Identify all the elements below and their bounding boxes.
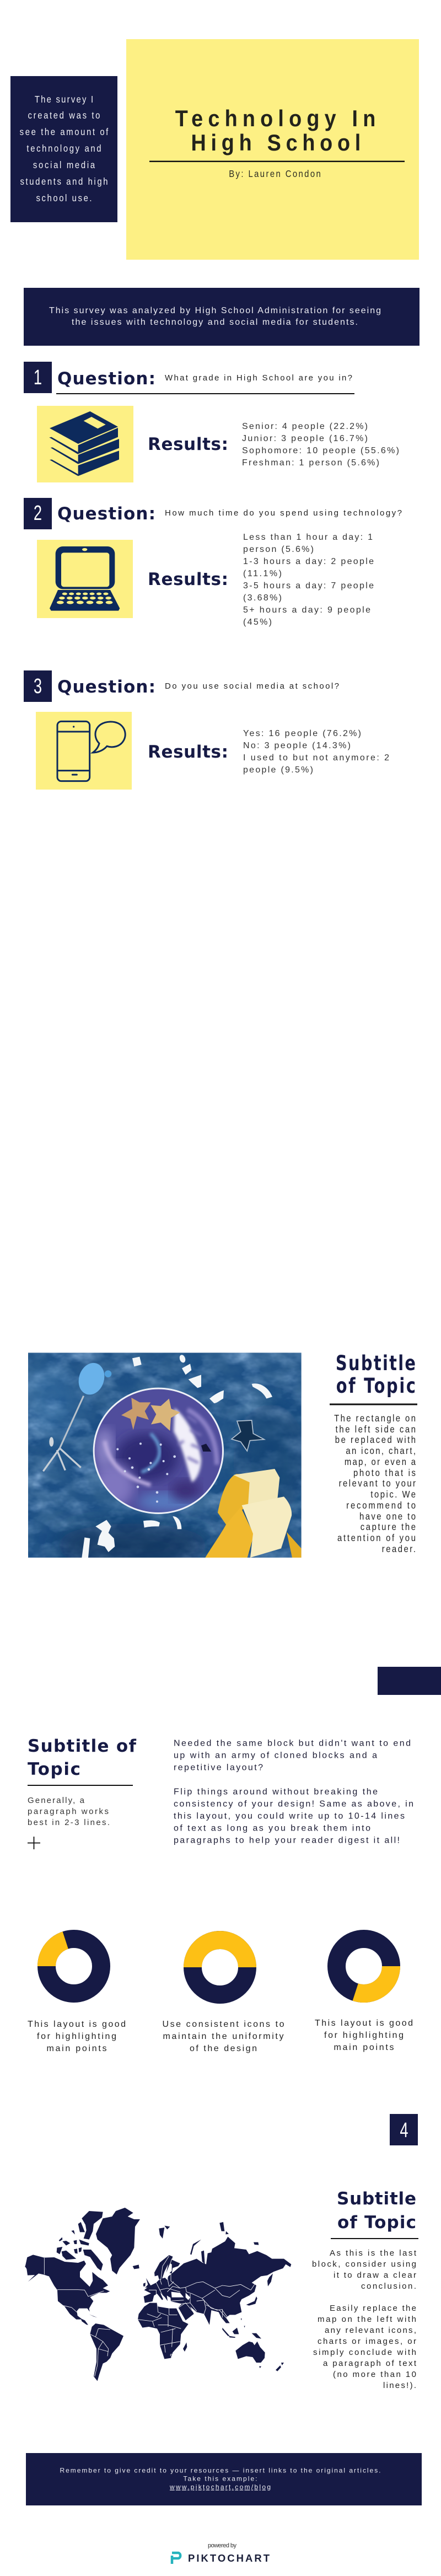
subtitle 1 heading: of Topic xyxy=(336,1373,416,1398)
question 3 text: Do you use social media at school? xyxy=(165,681,339,691)
title: High School xyxy=(191,130,361,155)
number badge 2: 2 xyxy=(34,502,42,525)
subtitle 3 heading xyxy=(337,2189,416,2232)
donut label 3: for highlighting xyxy=(324,2031,404,2040)
footer banner: credits xyxy=(26,2453,422,2505)
donut label 1: for highlighting xyxy=(37,2032,116,2041)
results 2 list: Less than 1 hour a day: 1 xyxy=(243,533,373,542)
coconut pieces xyxy=(82,1354,272,1558)
results 2 label: Results: xyxy=(148,570,228,589)
results 1 list: Senior: 4 people (22.2%) xyxy=(242,422,368,431)
results 2 list: 3-5 hours a day: 7 people xyxy=(243,581,374,591)
body paragraph block xyxy=(174,1739,413,1845)
question 3 heading: Question: xyxy=(57,677,155,697)
star cookie cutter xyxy=(232,1420,264,1451)
question 1 heading: Question: xyxy=(57,369,155,389)
title panel xyxy=(126,39,419,260)
subtitle 3 paragraphs: map on the left with xyxy=(318,2315,416,2324)
number badge 2 xyxy=(24,498,52,529)
results 3 list: No: 3 people (14.3%) xyxy=(243,741,351,750)
body paragraph block: of text as long as you break them into xyxy=(174,1824,370,1833)
results 3 label: Results: xyxy=(148,742,228,762)
subtitle 3 paragraphs: simply conclude with xyxy=(313,2348,416,2357)
question 2 section xyxy=(24,498,402,627)
donut label 3 xyxy=(315,2019,413,2052)
subtitle 1 paragraph: attention of you xyxy=(337,1533,416,1543)
subtitle 3 paragraphs: it to draw a clear xyxy=(334,2271,416,2280)
subtitle 2 short paragraph: Generally, a xyxy=(28,1796,85,1805)
footer banner: credits: Remember to give credit to your resources — insert links to the original articles. xyxy=(60,2467,381,2475)
subtitle 1 heading: Subtitle xyxy=(336,1351,416,1375)
intro text: social media xyxy=(33,160,95,170)
body paragraph block: paragraphs to help your reader digest it all! xyxy=(174,1836,400,1845)
subtitle 1 paragraph: the left side can xyxy=(336,1424,416,1435)
subtitle block 2 xyxy=(28,1736,137,1849)
subtitle 3 heading: Subtitle xyxy=(337,2189,416,2209)
navy corner block xyxy=(378,1667,441,1695)
results 1 label: Results: xyxy=(148,434,228,454)
donut label 2 xyxy=(162,2020,284,2053)
donut label 3: This layout is good xyxy=(315,2019,413,2028)
body paragraph block: consistency of your design! Same as above, in xyxy=(174,1800,413,1808)
intro text xyxy=(20,94,109,203)
results 2 list: (11.1%) xyxy=(243,569,282,578)
results 3 list: people (9.5%) xyxy=(243,765,313,775)
donut label 1 xyxy=(28,2020,126,2053)
subtitle 3 paragraphs: a paragraph of text xyxy=(323,2359,417,2368)
subtitle 2 short paragraph: paragraph works xyxy=(28,1807,109,1816)
results 1 list xyxy=(242,422,399,468)
subtitle 3 paragraphs: Easily replace the xyxy=(330,2304,416,2313)
results 2 list: 5+ hours a day: 9 people xyxy=(243,605,370,615)
subtitle 3 heading: of Topic xyxy=(337,2213,416,2232)
map: Europe, Africa, Asia, Oceania xyxy=(138,2222,291,2371)
banana xyxy=(205,1469,302,1558)
bowl xyxy=(93,1388,224,1515)
results 3 list xyxy=(243,729,389,775)
powered by Piktochart logo: powered by xyxy=(208,2542,237,2549)
subtitle 3 paragraphs: (no more than 10 xyxy=(333,2370,416,2379)
subtitle 3 paragraphs xyxy=(312,2248,417,2390)
body paragraph block: up with an army of cloned blocks and a xyxy=(174,1751,377,1760)
footer banner: credits: Take this example: xyxy=(183,2475,257,2482)
subtitle 1 paragraph: topic. We xyxy=(370,1489,416,1500)
question 1 section xyxy=(24,362,399,482)
subtitle 2 heading: Topic xyxy=(28,1759,80,1779)
results 1 list: Sophomore: 10 people (55.6%) xyxy=(242,446,399,455)
subtitle 1 paragraph: capture the xyxy=(361,1522,416,1532)
world map xyxy=(25,2208,291,2381)
question 2 heading: Question: xyxy=(57,504,155,524)
subtitle 1 heading xyxy=(336,1351,416,1398)
intro panel: survey purpose xyxy=(10,76,117,222)
icon: Piktochart mark xyxy=(172,2553,180,2564)
icon: laptop xyxy=(37,540,133,618)
banner: survey analysis note: the issues with technology and social media for students. xyxy=(72,318,358,327)
icon: plus xyxy=(28,1837,40,1849)
donut label 2: of the design xyxy=(190,2044,257,2053)
number badge 1: 1 xyxy=(34,366,42,389)
donut label 3: main points xyxy=(334,2043,394,2052)
subtitle 2 heading: Subtitle of xyxy=(28,1736,137,1756)
subtitle 2 heading xyxy=(28,1736,137,1779)
subtitle 1 paragraph: photo that is xyxy=(353,1468,416,1478)
number badge 3: 3 xyxy=(34,675,42,698)
subtitle 3 paragraphs: As this is the last xyxy=(330,2248,417,2258)
donut label 1: main points xyxy=(46,2044,107,2053)
question 1 text: What grade in High School are you in? xyxy=(165,373,352,383)
number badge 4: 4 xyxy=(400,2119,408,2142)
number badge 3 xyxy=(24,670,52,702)
results 2 list: (3.68%) xyxy=(243,593,282,603)
body paragraph block: Needed the same block but didn't want to end xyxy=(174,1739,411,1748)
icon: phone with speech bubble xyxy=(36,712,132,790)
subtitle 3 paragraphs: lines!). xyxy=(383,2381,416,2390)
body paragraph block: Flip things around without breaking the xyxy=(174,1788,378,1796)
subtitle 3 paragraphs: conclusion. xyxy=(361,2282,416,2291)
donut chart 3 xyxy=(336,1939,400,2003)
number badge 1 xyxy=(24,362,52,393)
subtitle block 1 xyxy=(330,1351,417,1554)
question 3 section xyxy=(24,670,389,790)
results 2 list: person (5.6%) xyxy=(243,545,314,554)
donut chart 2 xyxy=(184,1931,256,1995)
subtitle 1 paragraph: recommend to xyxy=(346,1500,416,1511)
powered by Piktochart logo xyxy=(172,2542,270,2564)
subtitle 1 paragraph: reader. xyxy=(382,1544,416,1554)
intro text: technology and xyxy=(26,143,101,154)
results 3 list: I used to but not anymore: 2 xyxy=(243,753,389,763)
subtitle 1 paragraph xyxy=(334,1413,416,1554)
results 2 list xyxy=(243,533,374,627)
subtitle 3 paragraphs: charts or images, or xyxy=(318,2337,416,2346)
donut label 2: maintain the uniformity xyxy=(163,2032,283,2041)
donut label 2: Use consistent icons to xyxy=(162,2020,284,2029)
results 2 list: 1-3 hours a day: 2 people xyxy=(243,557,374,566)
title xyxy=(175,106,375,155)
subtitle 1 paragraph: an icon, chart, xyxy=(346,1446,416,1456)
footer banner: credits: www.piktochart.com/blog xyxy=(169,2483,271,2491)
results 3 list: Yes: 16 people (76.2%) xyxy=(243,729,361,738)
donut chart 1 xyxy=(37,1931,101,1994)
results 1 list: Freshman: 1 person (5.6%) xyxy=(242,458,379,468)
subtitle 3 paragraphs: any relevant icons, xyxy=(325,2326,416,2335)
subtitle 1 paragraph: be replaced with xyxy=(335,1435,416,1445)
subtitle 3 paragraphs: block, consider using xyxy=(312,2260,416,2269)
subtitle 1 paragraph: map, or even a xyxy=(345,1457,416,1467)
spoon xyxy=(43,1360,111,1471)
subtitle 2 short paragraph xyxy=(28,1796,110,1827)
intro text: The survey I xyxy=(35,94,93,105)
banner: survey analysis note: This survey was analyzed by High School Administration for seeing xyxy=(49,306,381,315)
subtitle 2 short paragraph: best in 2-3 lines. xyxy=(28,1818,110,1827)
subtitle 1 paragraph: The rectangle on xyxy=(334,1413,416,1424)
question 2 text: How much time do you spend using technology? xyxy=(165,508,402,518)
intro text: school use. xyxy=(36,193,92,203)
number badge 4 xyxy=(390,2114,418,2145)
intro text: students and high xyxy=(20,176,107,187)
subtitle block 3 xyxy=(312,2189,418,2390)
powered by Piktochart logo: PIKTOCHART xyxy=(188,2552,270,2564)
icon: stack of books xyxy=(37,406,133,482)
results 1 list: Junior: 3 people (16.7%) xyxy=(242,434,368,443)
intro text: see the amount of xyxy=(20,127,109,137)
banner: survey analysis note xyxy=(24,288,420,346)
subtitle 1 paragraph: relevant to your xyxy=(339,1478,416,1489)
results 2 list: (45%) xyxy=(243,618,272,627)
map: Americas and Arctic xyxy=(25,2208,140,2381)
body paragraph block: repetitive layout? xyxy=(174,1763,263,1772)
title: Technology In xyxy=(175,106,375,131)
author byline: By: Lauren Condon xyxy=(229,169,321,179)
intro text: created was to xyxy=(28,110,100,121)
photo: smoothie bowl on blue surface xyxy=(26,1353,307,1568)
donut label 1: This layout is good xyxy=(28,2020,126,2029)
subtitle 1 paragraph: have one to xyxy=(359,1511,416,1522)
body paragraph block: this layout, you could write up to 10-14 lines xyxy=(174,1812,405,1821)
